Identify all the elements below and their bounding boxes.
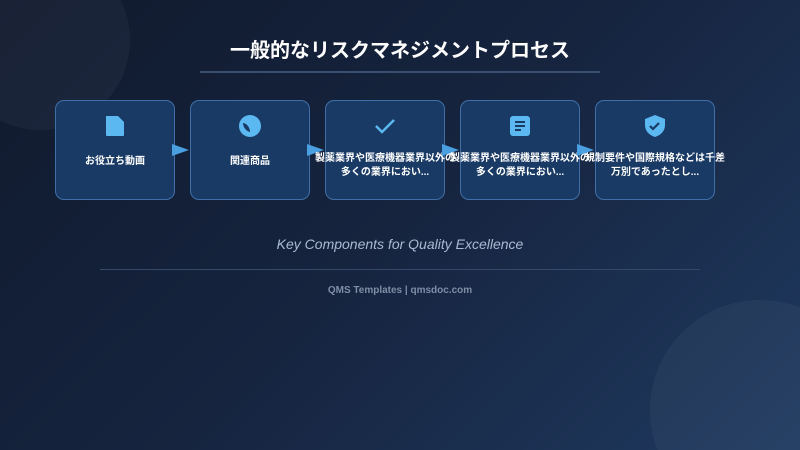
panel: step 4	[460, 100, 580, 200]
panel: step 3	[325, 100, 445, 200]
panel: step 5	[595, 100, 715, 200]
panel: step 2	[190, 100, 310, 200]
icon: file	[106, 116, 124, 136]
arrow 1	[172, 144, 189, 156]
arrow 3	[442, 144, 459, 156]
panel: step 1	[55, 100, 175, 200]
title: 一般的なリスクマネジメントプロセス	[230, 40, 570, 62]
panel: step 2: 関連商品	[230, 156, 270, 167]
subtitle: Key Components for Quality Excellence	[277, 236, 523, 252]
arrow 4	[577, 144, 594, 156]
footer: QMS Templates | qmsdoc.com	[328, 285, 472, 296]
panel: step 5: 万別であったとし...	[611, 167, 699, 178]
arrow 2	[307, 144, 324, 156]
icon: check	[375, 119, 395, 134]
panel: step 5: 規制要件や国際規格などは千差	[585, 153, 725, 164]
panel: step 3: 製薬業界や医療機器業界以外の	[315, 153, 455, 164]
panel: step 3: 多くの業界におい...	[341, 167, 429, 178]
icon: leaf circle	[239, 115, 261, 137]
panel: step 4: 製薬業界や医療機器業界以外の	[450, 153, 590, 164]
panel: step 1: お役立ち動画	[85, 156, 145, 167]
icon: document	[510, 116, 530, 136]
icon: shield check	[645, 115, 665, 137]
panel: step 4: 多くの業界におい...	[476, 167, 564, 178]
